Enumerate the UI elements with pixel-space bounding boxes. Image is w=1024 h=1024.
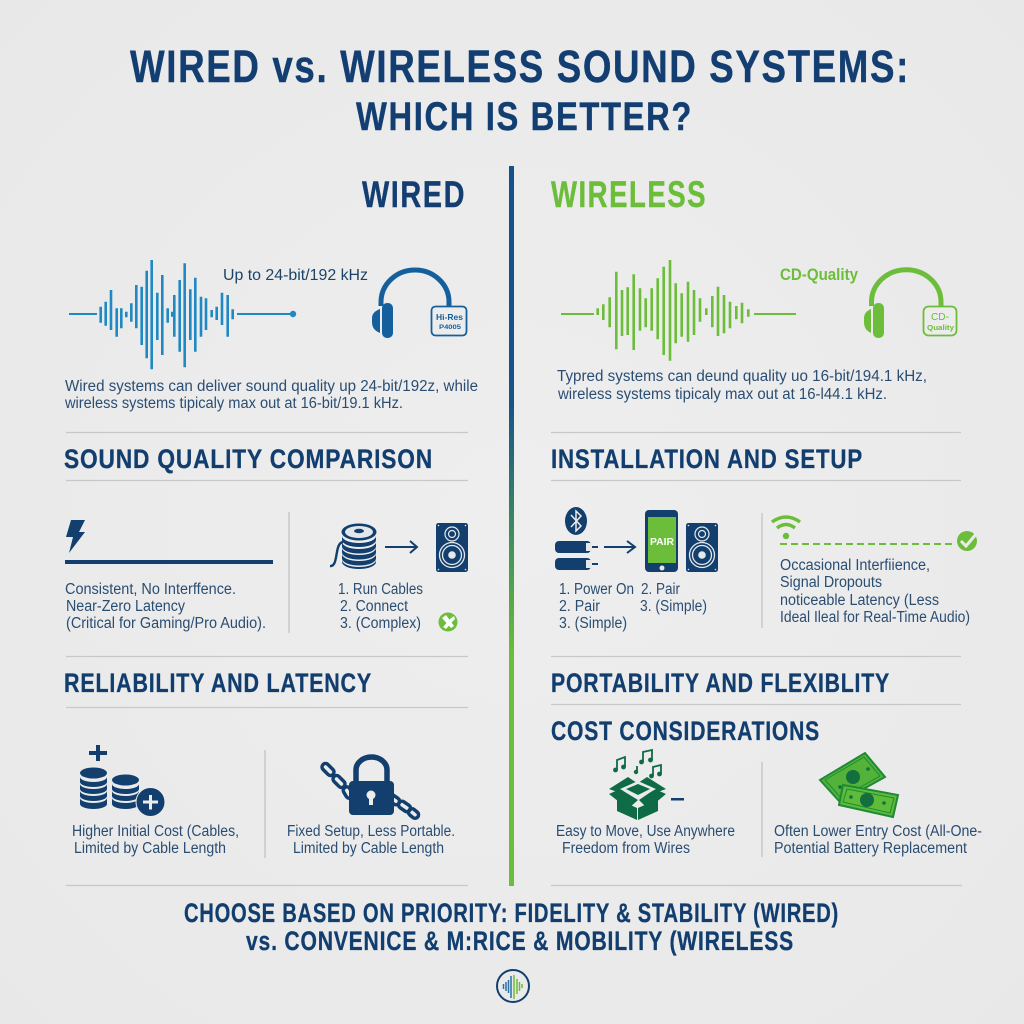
- text: wired sound quality: Wired systems can deliver sound quality up 24-bit/192z, while: [65, 378, 478, 395]
- text: reliability: Consistent, No Interffence.: [65, 581, 236, 598]
- icon: wired headphones: [372, 270, 466, 338]
- text: wireless reliability: noticeable Latency (Less: [780, 592, 939, 609]
- text: wireless setup steps: [559, 581, 707, 632]
- icon: footer logo: [497, 970, 529, 1002]
- heading: installation and setup: INSTALLATION AND SETUP: [551, 444, 863, 474]
- text: wireless portability: Easy to Move, Use Anywhere: [556, 823, 735, 840]
- icon: bluetooth: [565, 507, 587, 535]
- text: wired portability: [287, 823, 455, 857]
- text: wireless reliability: Occasional Interfiience,: [780, 557, 930, 574]
- title: WHICH IS BETTER?: [356, 95, 693, 139]
- text: wireless sound quality: [557, 368, 927, 403]
- text: wired sound quality: [64, 378, 478, 412]
- icon: green tool badge: [438, 612, 458, 632]
- icon: wireless headphones: CD-: [931, 312, 949, 323]
- panel: wireless: [551, 174, 982, 857]
- text: wireless setup steps: 3. (Simple): [640, 598, 707, 615]
- conclusion: vs. CONVENICE & M:RICE & MOBILITY (WIRELESS: [246, 926, 794, 956]
- icon: padlock and chain: [321, 757, 420, 820]
- text: wired cost: [72, 823, 239, 857]
- arrow: spool to speaker: [385, 541, 417, 553]
- icon: battery plugs: [555, 541, 598, 570]
- icon: wired headphones: Hi-Res: [436, 312, 463, 322]
- text: wireless setup steps: 2. Pair: [559, 598, 600, 615]
- icon: lightning bolt: [66, 520, 85, 553]
- text: reliability: [65, 581, 266, 632]
- icon: banknotes: [820, 753, 898, 817]
- text: wired setup steps: 2. Connect: [340, 598, 409, 615]
- icon: wifi: [772, 517, 800, 539]
- text: wireless portability: [556, 823, 735, 857]
- waveform: wired: [69, 260, 296, 369]
- icon: wired headphones: P4005: [439, 325, 462, 331]
- waveform: wireless: [561, 260, 796, 361]
- icon: coin stacks: [80, 745, 165, 816]
- text: wireless setup steps: 2. Pair: [641, 581, 680, 598]
- text: wireless reliability: Ideal Ileal for Real-Time Audio): [780, 609, 970, 626]
- label: wireless quality: CD-Quality: [780, 265, 858, 284]
- text: wireless setup steps: 1. Power On: [559, 581, 634, 598]
- text: wired cost: Higher Initial Cost (Cables,: [72, 823, 239, 840]
- arrow: plugs to phone: [604, 541, 635, 553]
- heading: sound quality comparison: SOUND QUALITY COMPARISON: [64, 444, 433, 474]
- panel: wired: [64, 174, 478, 857]
- heading: cost considerations: COST CONSIDERATIONS: [551, 716, 820, 746]
- label: wired quality: Up to 24-bit/192 kHz: [223, 267, 368, 284]
- icon: speaker: [686, 523, 718, 572]
- icon: wireless headphones: Quality: [927, 325, 954, 332]
- icon: check badge: [957, 531, 977, 551]
- text: wireless cost: [774, 823, 982, 857]
- text: wireless cost: Often Lower Entry Cost (All-One-: [774, 823, 982, 840]
- icon: open box with music notes: [609, 750, 684, 820]
- icon: phone with pair screen: [645, 510, 678, 572]
- icon: phone with pair screen: PAIR: [650, 537, 675, 548]
- dashed signal line: [780, 543, 956, 545]
- heading: portability and flexibility: PORTABILITY AND FLEXIBLITY: [551, 668, 890, 698]
- text: wired cost: Limited by Cable Length: [74, 840, 226, 857]
- central divider: [509, 166, 514, 886]
- text: wireless sound quality: Typred systems can deund quality uo 16-bit/194.1 kHz,: [557, 368, 927, 385]
- text: wired setup steps: 3. (Complex): [340, 615, 421, 632]
- icon: speaker: [436, 523, 468, 572]
- text: wired portability: Fixed Setup, Less Portable.: [287, 823, 455, 840]
- text: wired portability: Limited by Cable Length: [293, 840, 444, 857]
- text: reliability: (Critical for Gaming/Pro Audio).: [66, 615, 266, 632]
- icon: cable spool: [330, 524, 376, 569]
- text: wired setup steps: [338, 581, 423, 632]
- cable line: [65, 560, 273, 564]
- text: wireless portability: Freedom from Wires: [562, 840, 690, 857]
- title: [130, 41, 910, 139]
- heading: reliability and latency: RELIABILITY AND LATENCY: [64, 668, 372, 698]
- text: wireless reliability: [780, 557, 970, 626]
- text: wired setup steps: 1. Run Cables: [338, 581, 423, 598]
- conclusion: [184, 898, 839, 956]
- text: wireless cost: Potential Battery Replacement: [774, 840, 968, 857]
- text: wireless setup steps: 3. (Simple): [559, 615, 627, 632]
- heading: wired: WIRED: [362, 174, 466, 215]
- icon: wireless headphones: [864, 270, 956, 338]
- heading: wireless: WIRELESS: [551, 174, 707, 215]
- text: wireless reliability: Signal Dropouts: [780, 574, 882, 591]
- text: reliability: Near-Zero Latency: [66, 598, 185, 615]
- text: wireless sound quality: wireless systems tipicaly max out at 16-l44.1 kHz.: [557, 386, 887, 403]
- text: wired sound quality: wireless systems tipicaly max out at 16-bit/19.1 kHz.: [64, 395, 403, 412]
